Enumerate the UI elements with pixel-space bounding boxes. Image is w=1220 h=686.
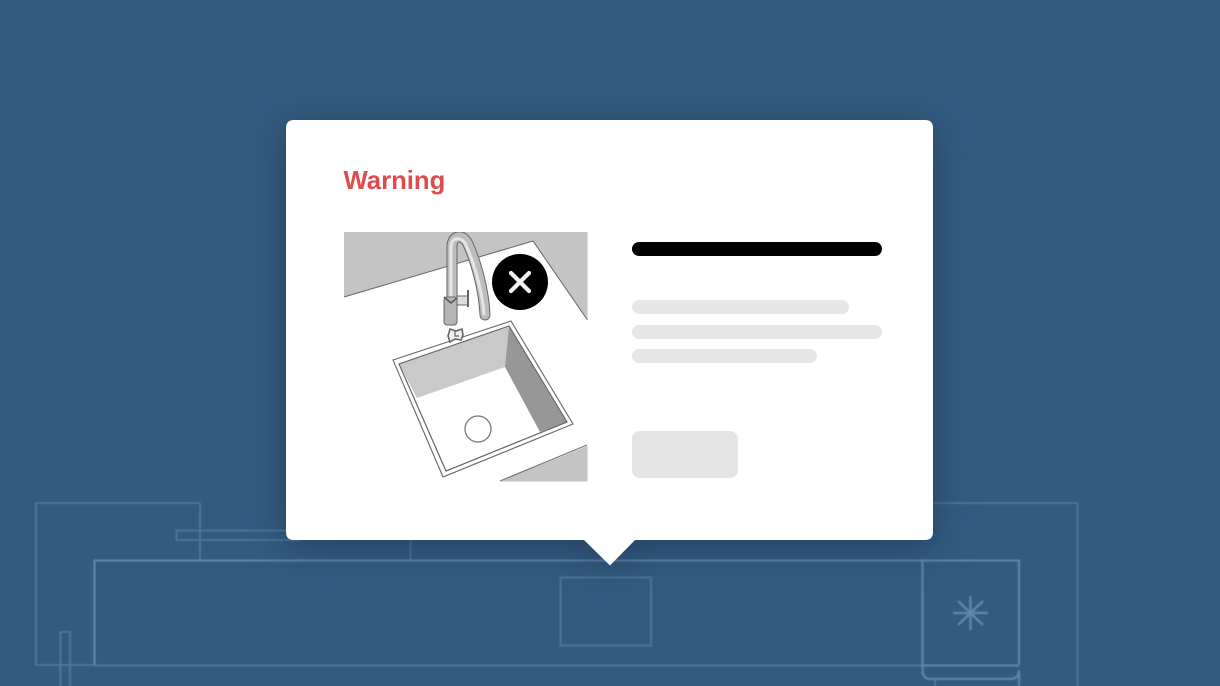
faucet lever [457, 296, 468, 305]
faucet connector [448, 329, 463, 342]
faucet spout [452, 237, 485, 315]
icon: asterisk burner [953, 596, 988, 630]
body text placeholder line 2 [632, 324, 882, 338]
icon: black circle with white cross [492, 254, 548, 310]
countertop background [344, 232, 588, 320]
faucet base [444, 297, 457, 325]
faucet [444, 237, 485, 342]
sink drain [465, 416, 491, 442]
heading: Warning: Warning [344, 167, 445, 195]
body text placeholder line 3 [632, 348, 817, 362]
illustration: sink with faucet and error mark [344, 232, 588, 482]
sink basin [393, 321, 573, 477]
button placeholder [632, 431, 738, 478]
dialog card with pointer [272, 114, 950, 578]
body text placeholder line 1 [632, 300, 849, 314]
title placeholder bar [632, 242, 882, 256]
panel: warning dialog [272, 114, 950, 578]
